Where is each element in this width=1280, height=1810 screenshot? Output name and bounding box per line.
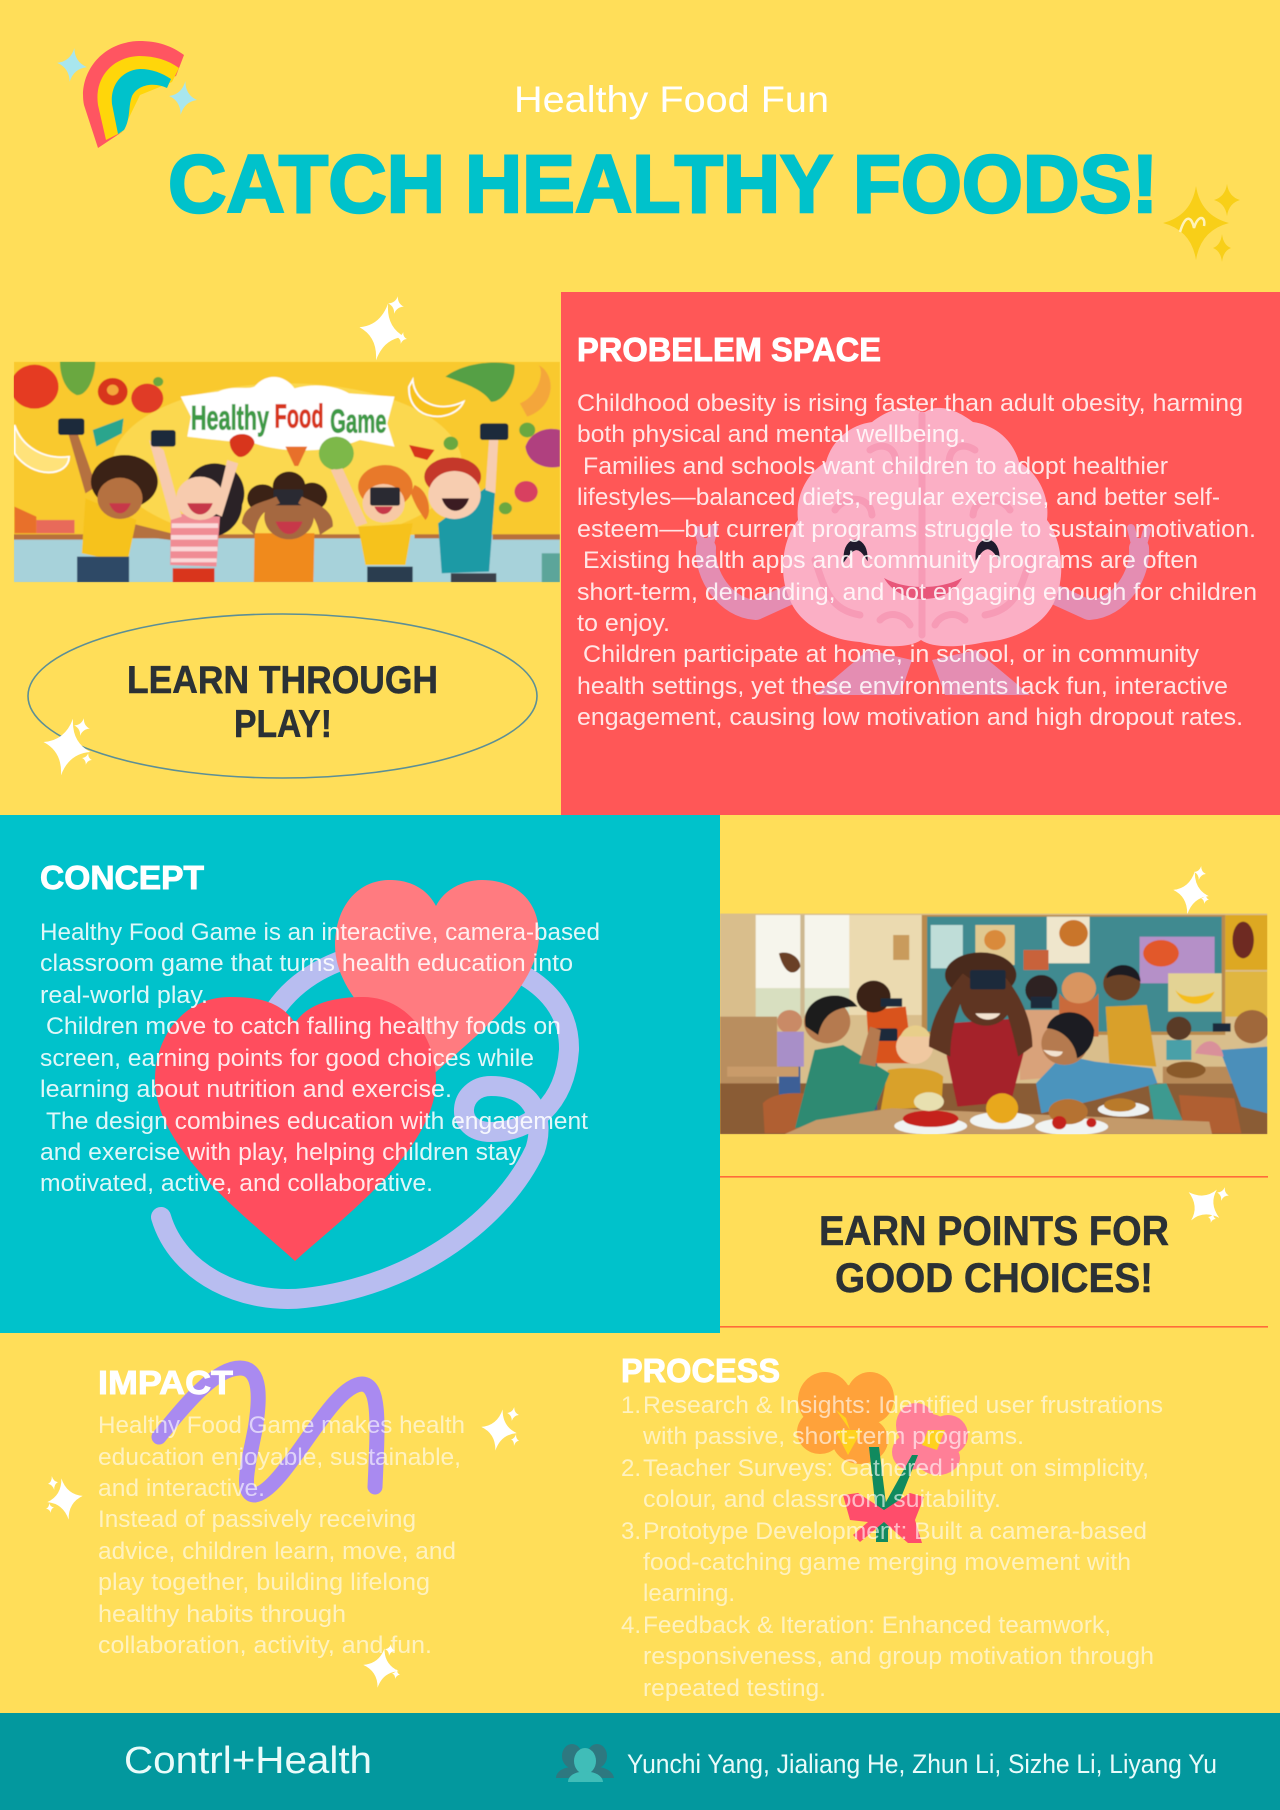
heading: impact: IMPACT: [98, 1364, 233, 1401]
title: FOODS!: [853, 139, 1158, 230]
text: impact body: advice, children learn, move, and: [98, 1538, 456, 1565]
text: concept body: classroom game that turns health education into: [40, 950, 573, 977]
subtitle: Healthy Food Fun: [514, 79, 829, 120]
illustration: Healthy Food Game kids banner: [11, 362, 560, 582]
bottom desks: [14, 535, 560, 582]
text: problem space body: both physical and mental wellbeing.: [577, 421, 966, 448]
illustration: classroom children with cameras: [720, 913, 1270, 1135]
title: HEALTHY: [465, 139, 833, 230]
speech cloud and game name: [181, 377, 395, 450]
text: process list: Feedback & Iteration: Enhanced teamwork,: [643, 1612, 1111, 1639]
right kids: [1162, 1066, 1233, 1084]
text: process list: [621, 1392, 1163, 1702]
panel: concept: [0, 815, 720, 1333]
text: problem space body: Families and schools want children to adopt healthier: [583, 453, 1168, 480]
text: impact body: healthy habits through: [98, 1601, 346, 1628]
chairs: [763, 1093, 806, 1133]
text: concept body: motivated, active, and collaborative.: [40, 1170, 433, 1197]
text: impact body: and interactive.: [98, 1475, 265, 1502]
text: concept body: Healthy Food Game is an interactive, camera-based: [40, 919, 600, 946]
text: process list: Research & Insights: Identified user frustrations: [643, 1392, 1163, 1419]
text: problem space body: Children participate at home, in school, or in community: [583, 641, 1199, 668]
text: process list: learning.: [643, 1580, 735, 1607]
icon: rainbow: [55, 41, 199, 148]
text: problem space body: to enjoy.: [577, 610, 670, 637]
illustration: Healthy Food Game kids banner: Healthy: [191, 398, 269, 437]
illustration: Healthy Food Game kids banner: Game: [330, 403, 387, 440]
text: process list: responsiveness, and group motivation through: [643, 1643, 1154, 1670]
text: process list: 1.: [621, 1392, 641, 1419]
heading: problem space: PROBELEM SPACE: [577, 331, 881, 368]
text: concept body: screen, earning points for good choices while: [40, 1045, 534, 1072]
background kids: [777, 1010, 802, 1033]
callout: earn points: EARN POINTS FOR: [819, 1207, 1169, 1254]
kid 5: [438, 487, 495, 573]
panel: impact: [98, 1364, 465, 1659]
sparkle: [37, 714, 97, 780]
icon: gold sparkle: [1163, 184, 1240, 262]
text: impact body: education enjoyable, sustainable,: [98, 1444, 461, 1471]
text: process list: Prototype Development: Built a camera-based: [643, 1518, 1147, 1545]
text: impact body: play together, building lifelong: [98, 1569, 430, 1596]
callout: earn points: GOOD CHOICES!: [835, 1254, 1153, 1301]
text: process list: Teacher Surveys: Gathered input on simplicity,: [643, 1455, 1149, 1482]
text: problem space body: engagement, causing low motivation and high dropout rates.: [577, 704, 1243, 731]
callout: learn through play: [28, 614, 537, 778]
icon: people: [556, 1744, 614, 1782]
sparkle: [1169, 865, 1213, 918]
text: problem space body: Existing health apps and community programs are often: [583, 547, 1198, 574]
text: problem space body: esteem—but current programs struggle to sustain motivation.: [577, 516, 1256, 543]
table and plates: [784, 1108, 1212, 1134]
decoration: light heart: [335, 880, 539, 1072]
text: impact body: Healthy Food Game makes health: [98, 1412, 465, 1439]
blue kid: [1036, 1055, 1157, 1113]
panel: process: [621, 1352, 1163, 1702]
red shirt kid: [947, 1018, 1024, 1107]
text: problem space body: Childhood obesity is rising faster than adult obesity, harming: [577, 390, 1243, 417]
text: process list: 3.: [621, 1518, 641, 1545]
text: problem space body: short-term, demanding, and not engaging enough for children: [577, 579, 1257, 606]
text: process list: 4.: [621, 1612, 641, 1639]
text: problem space body: lifestyles—balanced diets, regular exercise, and better self-: [577, 484, 1220, 511]
panel: problem space: [561, 292, 1280, 815]
decoration: purple scribble: [159, 1368, 377, 1495]
decoration: lavender swirl: [161, 949, 569, 1299]
title: CATCH: [168, 139, 445, 230]
kid 1: [68, 434, 93, 494]
illustration: Healthy Food Game kids banner: Food: [275, 398, 324, 435]
callout: earn points: [720, 1176, 1268, 1328]
illustration: smiling brain: [698, 408, 1147, 695]
decoration: red heart: [155, 997, 436, 1261]
text: process list: with passive, short-term programs.: [642, 1423, 1024, 1450]
heading: concept: CONCEPT: [40, 859, 204, 896]
text: process list: colour, and classroom suitability.: [643, 1486, 1001, 1513]
sparkle: [1176, 1177, 1232, 1233]
illustration: flower bouquet: [797, 1372, 968, 1543]
text: concept body: real-world play.: [40, 982, 208, 1009]
text: impact body: collaboration, activity, and fun.: [98, 1632, 432, 1659]
text: concept body: Children move to catch falling healthy foods on: [46, 1013, 561, 1040]
title: [168, 139, 1158, 230]
kid 4: [358, 465, 413, 508]
text: concept body: learning about nutrition and exercise.: [40, 1076, 452, 1103]
sparkles: impact: [44, 1406, 520, 1691]
footer: [0, 1713, 1280, 1810]
sparkle: [353, 295, 411, 365]
text: impact body: [98, 1412, 465, 1659]
kid 2: [188, 462, 245, 518]
green kid: [795, 1045, 890, 1128]
heading: process: PROCESS: [621, 1352, 780, 1389]
text: concept body: [40, 919, 600, 1197]
text: concept body: The design combines education with engagement: [46, 1108, 588, 1135]
kid 3: [254, 533, 315, 582]
text: problem space body: health settings, yet these environments lack fun, interactive: [577, 673, 1228, 700]
text: problem space body: [577, 390, 1257, 731]
text: impact body: Instead of passively receiving: [98, 1506, 416, 1533]
text: process list: 2.: [621, 1455, 641, 1482]
callout: learn through play: LEARN THROUGH: [127, 659, 438, 702]
team members: Yunchi Yang, Jialiang He, Zhun Li, Sizhe Li, Liyang Yu: [627, 1749, 1217, 1779]
text: process list: repeated testing.: [643, 1675, 826, 1702]
team name: Contrl+Health: [124, 1740, 372, 1782]
text: concept body: and exercise with play, helping children stay: [40, 1139, 521, 1166]
text: process list: food-catching game merging movement with: [643, 1549, 1131, 1576]
callout: learn through play: PLAY!: [234, 703, 332, 746]
